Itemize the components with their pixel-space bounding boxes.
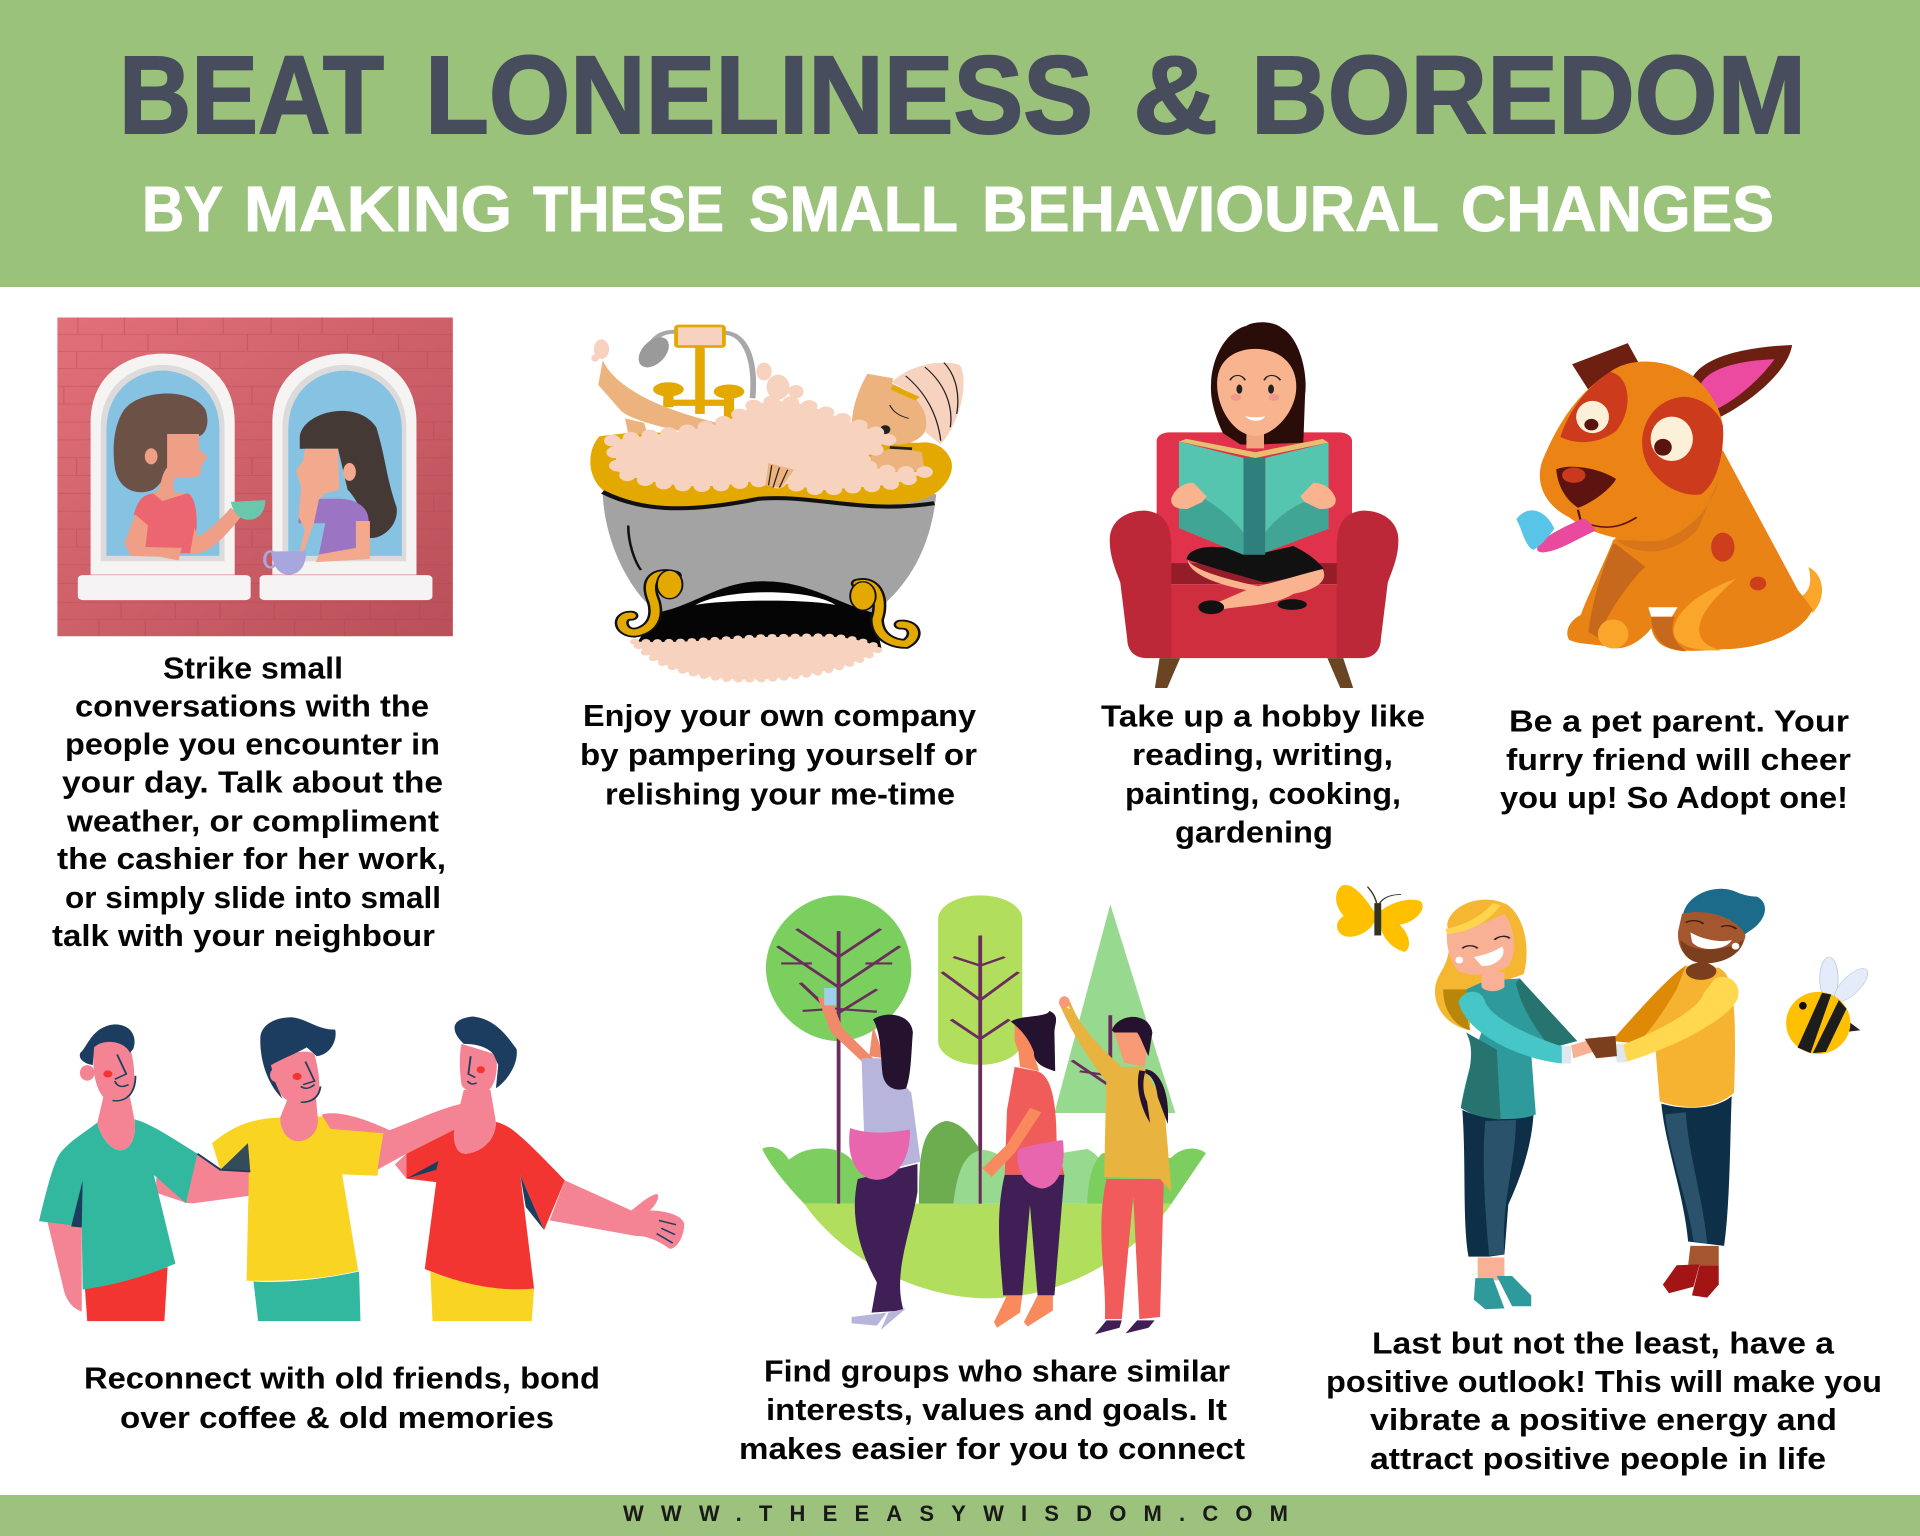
caption: weather, or compliment [66,803,439,838]
caption: makes easier for you to connect [739,1431,1245,1466]
caption: Be a pet parent. Your [1509,704,1849,739]
caption: you up! So Adopt one! [1500,780,1848,815]
panel: be a pet parent [1500,343,1851,815]
caption: Reconnect with old friends, bond [84,1360,600,1396]
illustration: three friends [39,1017,684,1321]
panel: reconnect with old friends [39,1017,684,1435]
illustration: two friends shaking hands, butterfly and bee [1336,885,1874,1309]
caption: people you encounter in [65,726,440,762]
subtitle: BY [142,173,223,245]
illustration: two women at windows [57,317,453,636]
woman with phone [818,988,921,1330]
panel: enjoy your own company [580,326,977,812]
reader figure [1171,322,1336,614]
left woman [114,394,265,560]
subtitle: BEHAVIOURAL [982,173,1439,245]
caption: furry friend will cheer [1506,742,1851,777]
subtitle [142,173,1774,245]
man waving [1059,996,1172,1334]
panel: strike small conversations [52,317,453,953]
subtitle: SMALL [749,173,958,245]
caption: reading, writing, [1132,737,1393,772]
title: BOREDOM [1251,34,1806,157]
caption: relishing your me-time [605,776,955,812]
footer bar [0,1495,1920,1536]
panel: find groups [739,895,1245,1466]
caption [739,1354,1245,1466]
illustration: woman reading in armchair [1110,322,1398,688]
caption: conversations with the [75,689,429,724]
caption [580,698,977,812]
caption: your day. Talk about the [62,764,443,800]
friend two [197,1017,383,1321]
illustration: puppy with butterfly [1516,343,1822,651]
caption [52,651,446,953]
woman with bag [982,1011,1064,1328]
caption: Last but not the least, have a [1372,1326,1835,1361]
website url: WWW.THEEASYWISDOM.COM [623,1501,1288,1526]
caption: over coffee & old memories [120,1400,554,1435]
caption [84,1360,600,1435]
caption: vibrate a positive energy and [1370,1402,1837,1437]
caption [1500,704,1851,815]
caption [1326,1326,1882,1476]
caption: Enjoy your own company [583,698,977,733]
caption: by pampering yourself or [580,737,977,772]
header banner [0,0,1920,287]
caption: or simply slide into small [65,880,441,915]
caption: gardening [1175,815,1333,850]
caption [1101,699,1425,850]
caption: the cashier for her work, [57,841,446,876]
panel: positive outlook [1326,885,1882,1476]
woman left [1435,900,1600,1309]
friend one [39,1024,250,1321]
caption: Take up a hobby like [1101,699,1425,734]
caption: Strike small [163,651,343,686]
illustration: woman in bubble bath [590,326,964,680]
caption: interests, values and goals. It [766,1392,1227,1427]
illustration: group in the park [758,895,1206,1334]
friend three [321,1017,684,1321]
caption: attract positive people in life [1370,1441,1826,1476]
subtitle: MAKING [244,173,512,245]
right woman [265,411,397,575]
icon: bee [1786,957,1874,1054]
subtitle: CHANGES [1461,173,1774,245]
caption: talk with your neighbour [52,918,435,953]
title: BEAT [119,34,384,157]
icon: butterfly [1336,885,1423,952]
caption: positive outlook! This will make you [1326,1364,1882,1399]
caption: Find groups who share similar [764,1354,1230,1389]
title [119,34,1806,157]
subtitle: THESE [533,173,724,245]
woman right [1585,889,1765,1298]
caption: painting, cooking, [1125,776,1401,811]
title: LONELINESS [425,34,1093,157]
title: & [1133,34,1218,157]
panel: take up a hobby [1101,322,1425,850]
